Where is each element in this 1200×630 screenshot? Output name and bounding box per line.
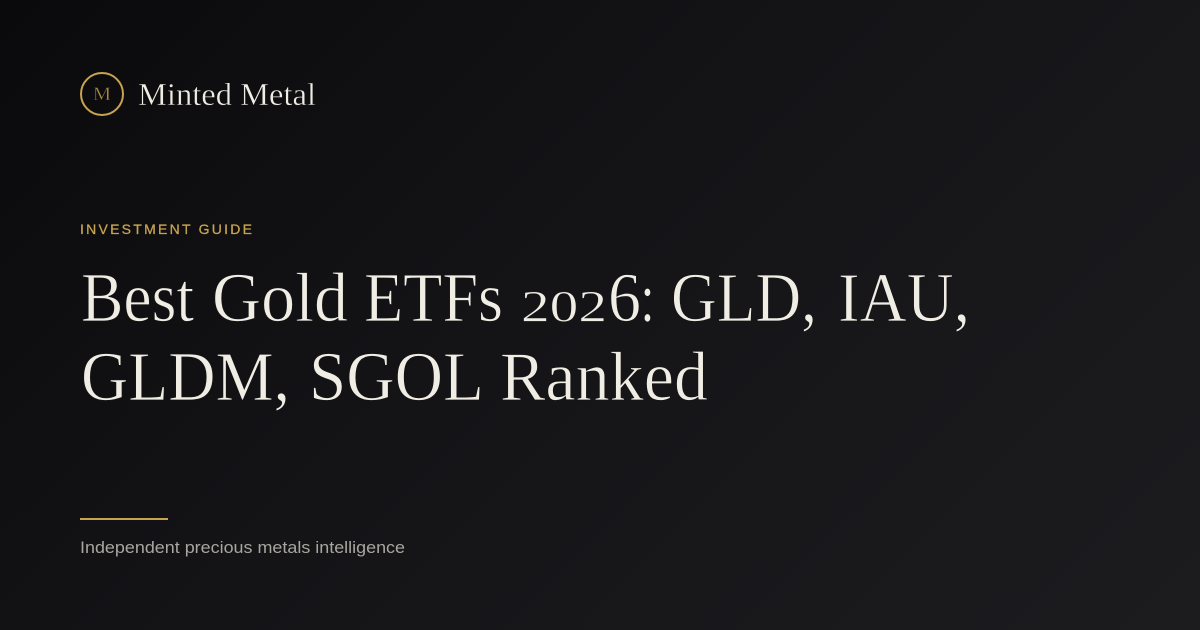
- title: ETFs: [364, 260, 503, 337]
- title: 202: [521, 282, 607, 331]
- title: 6: [608, 260, 641, 337]
- brand name: Minted Metal: [138, 76, 316, 112]
- icon: M monogram circle: [81, 73, 123, 115]
- title: Gold: [212, 260, 348, 337]
- title: IAU,: [838, 260, 970, 337]
- title: Best: [81, 260, 194, 337]
- title: Ranked: [500, 339, 708, 416]
- brand logo: [81, 73, 316, 115]
- title: [81, 260, 970, 416]
- title: GLD,: [671, 260, 817, 337]
- gold divider: [80, 518, 168, 520]
- title: GLDM,: [81, 339, 290, 416]
- eyebrow label: INVESTMENT GUIDE: [80, 221, 252, 237]
- tagline: Independent precious metals intelligence: [80, 538, 405, 557]
- title: SGOL: [309, 339, 484, 416]
- icon: M monogram circle: M: [93, 84, 111, 105]
- title: :: [640, 260, 655, 337]
